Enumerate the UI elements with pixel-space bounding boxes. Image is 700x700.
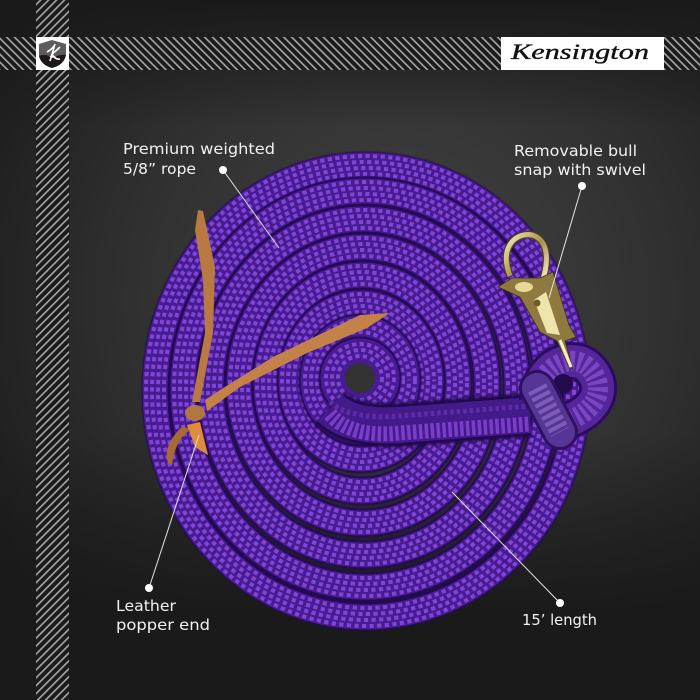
coil ring 7 [305,320,415,440]
coil ring 4 [230,238,496,532]
Kensington wordmark logo: Kensington [510,39,649,64]
callout: 15' length: 15’ length [522,611,597,629]
leather popper end [167,210,390,465]
rope loop and knot [537,361,598,432]
thick rope to knot [330,402,530,434]
callout: Removable bull snap: snap with swivel [514,161,646,179]
callout: Premium weighted rope: Premium weighted [123,140,275,158]
coil ring 2 [174,182,556,596]
callout: 15' length [452,492,597,629]
purple coiled rope [146,156,598,626]
callout: Premium weighted rope [123,140,279,248]
coil ring 6 [282,294,440,468]
callout: Removable bull snap: Removable bull [514,142,637,160]
callout: Leather popper end [116,435,210,634]
coil ring 3 [202,210,526,564]
callout: Leather popper end: Leather [116,597,177,615]
bull snap with swivel [498,235,576,370]
icon: Kensington shield logo [36,37,69,70]
coil ring 5 [257,266,467,500]
Kensington wordmark logo [501,37,664,70]
coil ring 1 [146,156,586,626]
callout: Leather popper end: popper end [116,616,210,634]
callout: Premium weighted rope: 5/8” rope [123,160,196,178]
coil centre hole [345,363,375,393]
callout: Removable bull snap [514,142,646,298]
coil centre ring [326,344,394,412]
